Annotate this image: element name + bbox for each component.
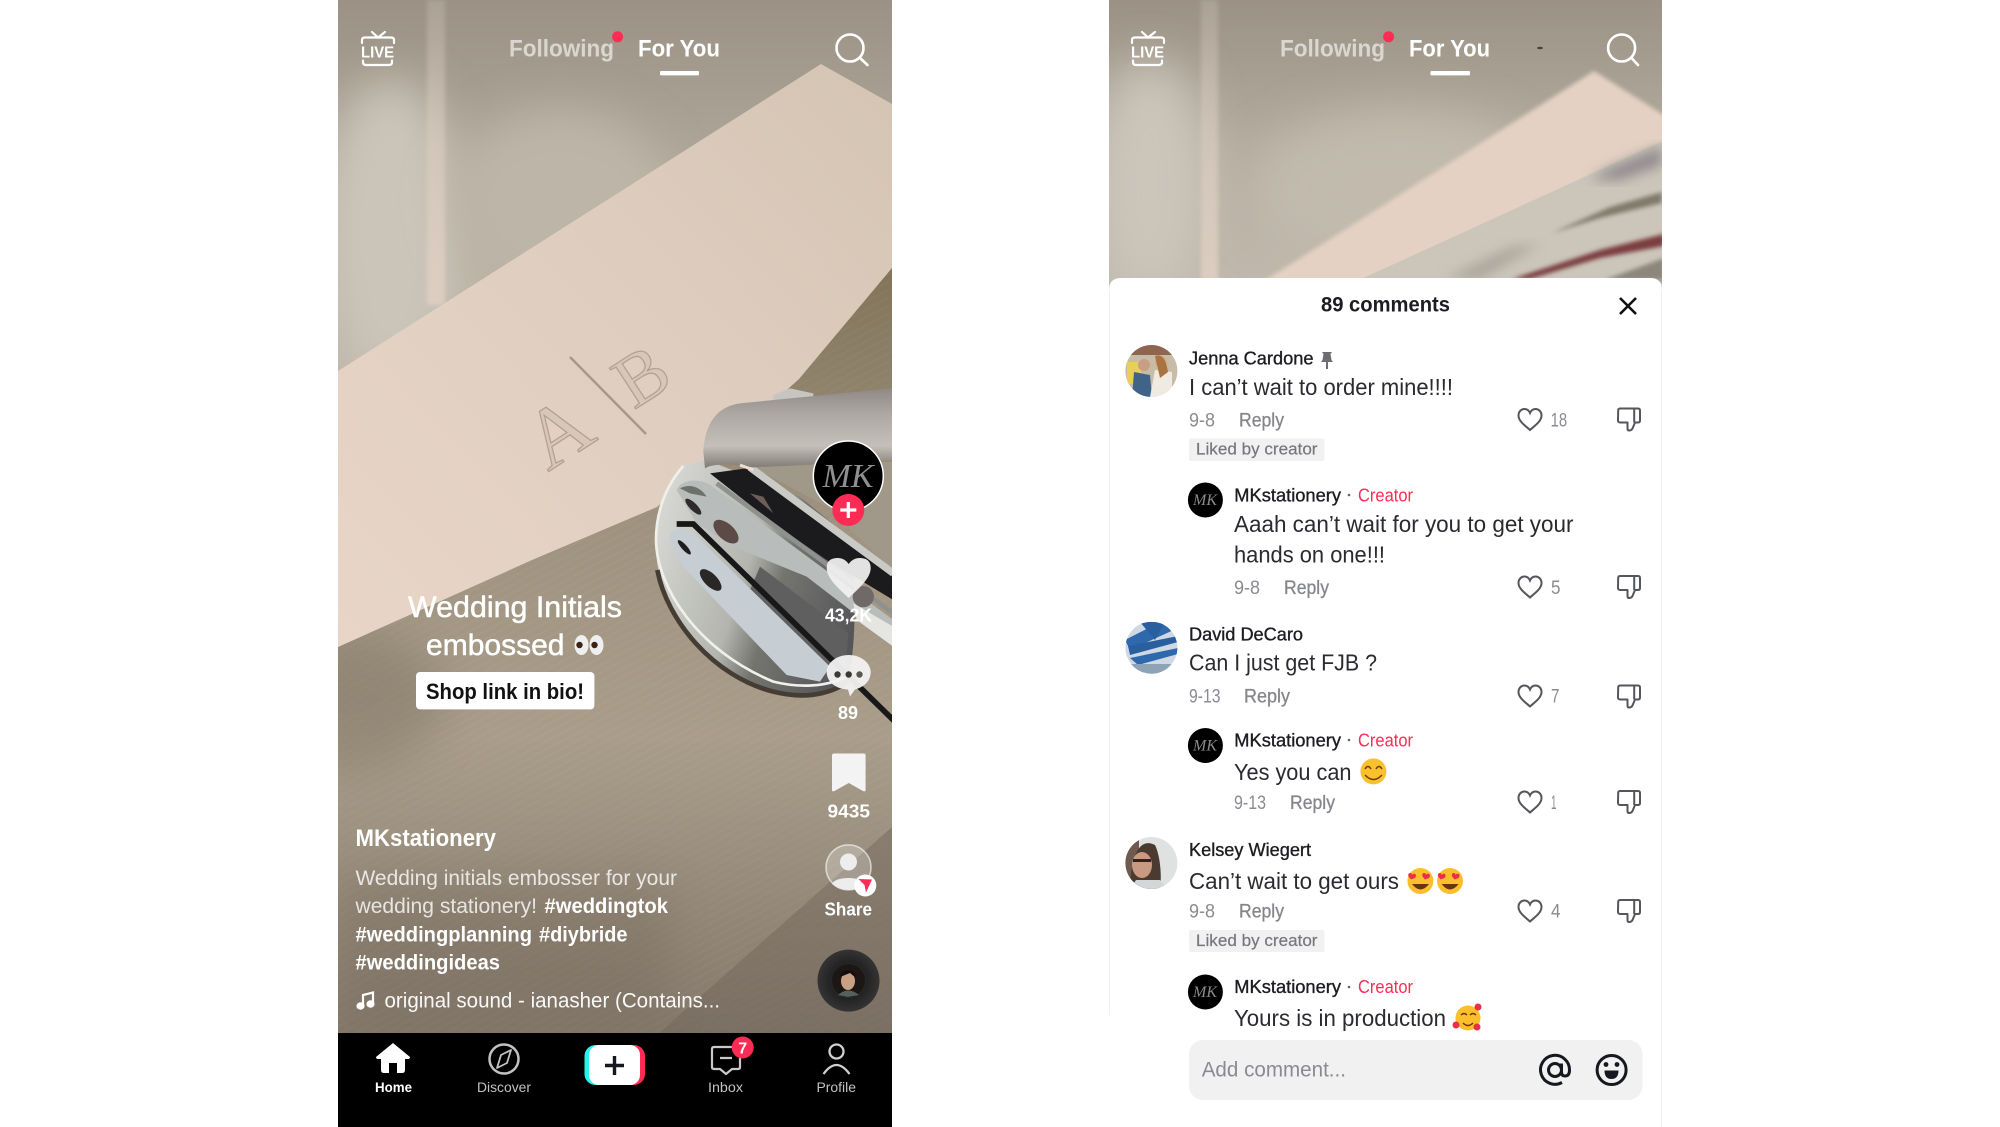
spinning sound disc xyxy=(818,950,880,1012)
reply: MKstationery 3 xyxy=(1188,974,1482,1031)
right action rail xyxy=(813,441,883,1012)
date and reply: 9-8 xyxy=(1189,410,1215,432)
date and reply xyxy=(1189,410,1284,432)
like count: 5 xyxy=(1551,578,1560,599)
date and reply: Reply xyxy=(1239,410,1284,432)
icon: at mention xyxy=(1541,1055,1570,1084)
like count xyxy=(1518,686,1560,708)
icon: search xyxy=(836,34,868,65)
avatar: MK xyxy=(1188,728,1223,763)
creator badge: Creator xyxy=(1358,486,1413,506)
liked by creator tag: Liked by creator xyxy=(1196,440,1318,458)
reply: MKstationery 1 xyxy=(1188,482,1640,599)
nav label: Discover: Discover xyxy=(477,1080,532,1095)
icon: dislike xyxy=(1618,576,1640,598)
comment: Jenna Cardone xyxy=(1125,345,1640,461)
nav label: Inbox: Inbox xyxy=(708,1080,743,1095)
author name: David DeCaro xyxy=(1189,624,1303,644)
date and reply xyxy=(1189,686,1290,708)
creator avatar with follow button: MK xyxy=(822,458,876,495)
icon: dislike xyxy=(1618,408,1640,430)
creator badge: Creator xyxy=(1358,730,1413,750)
icon: inbox with badge: 7 xyxy=(738,1040,747,1058)
reply text: hands on one!!! xyxy=(1234,542,1385,568)
icon: profile xyxy=(824,1044,850,1074)
white label: shop link: Shop link in bio! xyxy=(426,679,584,704)
comment text: Can I just get FJB ? xyxy=(1189,650,1377,676)
embossed initials: A xyxy=(508,377,610,488)
embosser tool photo xyxy=(656,388,897,723)
author name: MKstationery xyxy=(1234,486,1341,506)
emoji: heart eyes pair xyxy=(1407,868,1463,894)
white label: shop link xyxy=(416,672,594,709)
date and reply: Reply xyxy=(1290,793,1335,814)
description and hashtags: #weddingplanning xyxy=(356,924,532,946)
icon: emoji face xyxy=(1597,1056,1626,1084)
emoji: smiling face xyxy=(1360,758,1386,784)
reply text: Yours is in production xyxy=(1234,1005,1446,1031)
panel: TikTok comments screen xyxy=(1090,0,1670,1127)
notification dot xyxy=(1383,31,1394,42)
description and hashtags xyxy=(354,867,677,974)
like count: 18 xyxy=(1551,410,1567,432)
icon: share avatar with red arrow xyxy=(826,845,876,896)
like count: 4 xyxy=(1551,902,1561,922)
icon: LIVE tv: LIVE xyxy=(361,44,394,62)
description and hashtags: #diybride xyxy=(539,924,628,946)
comment text: Can’t wait to get ours xyxy=(1189,868,1399,894)
nav label: Home: Home xyxy=(375,1080,412,1095)
icon: eyes emoji xyxy=(574,635,604,655)
like count xyxy=(1518,792,1556,814)
video description xyxy=(354,825,720,1012)
sound name: original sound - ianasher (Contains... xyxy=(384,990,720,1012)
icon: dislike xyxy=(1618,791,1640,813)
tab: Following: Following xyxy=(1280,36,1385,62)
date and reply: Reply xyxy=(1239,902,1284,922)
like count: 7 xyxy=(1551,686,1560,708)
comment: David DeCaro xyxy=(1125,621,1640,708)
tab: For You: For You xyxy=(638,36,720,62)
date and reply: 9-13 xyxy=(1234,793,1266,814)
like count xyxy=(1518,409,1567,432)
caption line 1: Wedding Initials xyxy=(408,591,622,624)
description and hashtags: Wedding initials embosser for your xyxy=(356,867,677,890)
author name: MKstationery xyxy=(356,825,497,852)
date and reply: 9-13 xyxy=(1189,686,1220,708)
avatar: MK: MK xyxy=(1192,492,1218,509)
icon: inbox with badge xyxy=(712,1036,754,1074)
top tabs: right screen xyxy=(1131,31,1638,75)
active tab underline xyxy=(660,71,699,75)
embossed initials xyxy=(538,350,668,472)
icon: home xyxy=(376,1043,410,1073)
date and reply xyxy=(1234,793,1335,814)
date and reply: 9-8 xyxy=(1234,578,1260,599)
panel: TikTok video feed screen xyxy=(338,0,892,1127)
nav label: Profile: Profile xyxy=(816,1080,856,1095)
liked by creator tag: Liked by creator xyxy=(1196,931,1318,950)
tab: For You: For You xyxy=(1409,36,1490,62)
icon: search xyxy=(1608,34,1638,65)
white comments sheet xyxy=(1109,278,1662,1127)
tab: Following: Following xyxy=(509,36,614,62)
date and reply: Reply xyxy=(1284,578,1329,599)
author name: MKstationery xyxy=(1234,730,1341,750)
like count: 1 xyxy=(1551,793,1556,814)
icon: bookmark xyxy=(832,754,866,791)
description and hashtags: #weddingideas xyxy=(356,952,500,974)
sheet title: 89 comments xyxy=(1321,294,1450,316)
reply: MKstationery 2 xyxy=(1188,728,1640,814)
icon: LIVE tv: LIVE xyxy=(1131,44,1164,62)
avatar: MK xyxy=(1188,974,1223,1010)
creator badge: Creator xyxy=(1358,977,1413,997)
blurred video behind comments xyxy=(1090,0,1670,300)
description and hashtags: wedding stationery! xyxy=(354,895,537,918)
author name: Jenna Cardone xyxy=(1189,348,1314,368)
creator avatar with follow button xyxy=(813,441,883,526)
embossed initials: B xyxy=(599,329,685,424)
emoji: smiling with hearts xyxy=(1452,1004,1482,1030)
author name: Kelsey Wiegert xyxy=(1189,840,1311,860)
icon: create plus button xyxy=(584,1045,645,1085)
bookmark count: 9435 xyxy=(828,802,870,822)
icon: music note xyxy=(358,992,374,1009)
video caption sticker xyxy=(408,591,622,709)
share label: Share xyxy=(824,900,872,920)
avatar: Jenna xyxy=(1125,345,1178,397)
description and hashtags: #weddingtok xyxy=(544,895,668,918)
reply text: Aaah can’t wait for you to get your xyxy=(1234,511,1574,537)
reply text xyxy=(1234,511,1574,568)
date and reply: 9-8 xyxy=(1189,902,1215,922)
reply text: Yes you can xyxy=(1234,759,1352,785)
icon: dislike xyxy=(1618,686,1640,708)
video background: wall and curtain xyxy=(338,0,892,371)
icon: LIVE tv xyxy=(361,32,394,65)
add comment input xyxy=(1189,1040,1642,1100)
top tabs: left screen xyxy=(361,31,868,75)
icon: dislike xyxy=(1618,900,1640,922)
placeholder text: Add comment... xyxy=(1202,1058,1346,1082)
date and reply xyxy=(1189,902,1284,922)
icon: LIVE tv xyxy=(1131,32,1164,65)
active tab underline xyxy=(1430,71,1470,75)
avatar: MK: MK xyxy=(1192,984,1218,1001)
avatar: MK: MK xyxy=(1192,738,1218,754)
video background: cream paper card xyxy=(338,64,892,647)
icon: discover compass xyxy=(490,1044,518,1074)
date and reply: Reply xyxy=(1244,686,1290,708)
author name: MKstationery xyxy=(1234,977,1341,997)
icon: comment bubble xyxy=(827,655,871,696)
avatar: MK xyxy=(1188,482,1223,518)
avatar: David xyxy=(1125,621,1178,674)
icon: like heart xyxy=(827,558,871,598)
like count: 43,2K xyxy=(825,606,872,626)
like count xyxy=(1518,576,1560,599)
notification dot xyxy=(612,31,623,42)
bottom navigation bar xyxy=(338,1033,892,1127)
date and reply xyxy=(1234,578,1329,599)
icon: pin xyxy=(1321,352,1333,369)
like count xyxy=(1518,900,1561,922)
caption line 2: embossed xyxy=(426,629,564,662)
comment text: I can’t wait to order mine!!!! xyxy=(1189,374,1453,400)
comment count: 89 xyxy=(838,703,858,723)
comment: Kelsey Wiegert xyxy=(1125,837,1640,952)
icon: close xyxy=(1620,298,1636,314)
avatar: Kelsey xyxy=(1125,837,1178,889)
video background: tan surface xyxy=(338,268,892,1033)
